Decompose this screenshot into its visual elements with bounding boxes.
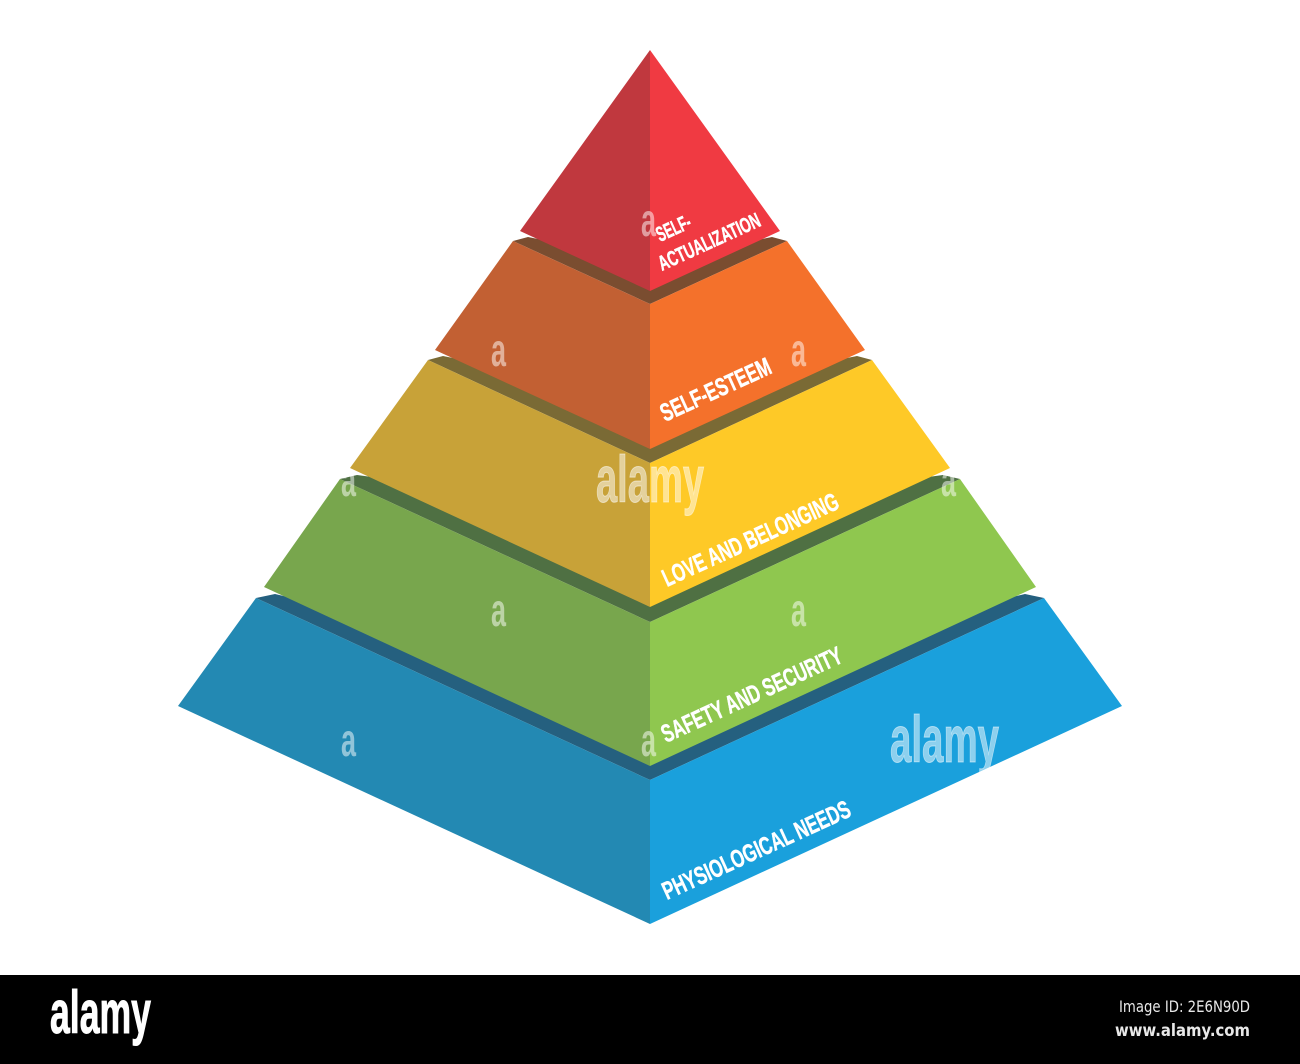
watermark tiles: a	[641, 714, 656, 766]
tier: physiological needs	[178, 594, 1122, 924]
tier: safety and security	[264, 475, 1036, 766]
footer logo: alamy	[50, 979, 151, 1046]
label: physiological needs: PHYSIOLOGICAL NEEDS	[658, 795, 855, 905]
label: self-actualization: SELF-	[653, 211, 695, 247]
label: self-esteem: SELF-ESTEEM	[656, 353, 776, 427]
label: safety and security: SAFETY AND SECURITY	[657, 642, 847, 748]
footer bar	[0, 975, 1300, 1064]
watermark tiles: alamy	[890, 702, 999, 776]
watermark tiles: a	[491, 324, 506, 376]
label: love and belonging: LOVE AND BELONGING	[658, 488, 843, 592]
watermark tiles: a	[341, 454, 356, 506]
watermark tiles	[341, 194, 999, 776]
watermark tiles: a	[341, 714, 356, 766]
pyramid	[178, 50, 1122, 924]
watermark tiles: a	[641, 194, 656, 246]
tier: love and belonging	[350, 356, 950, 607]
watermark tiles: alamy	[596, 442, 704, 516]
label: self-actualization	[653, 209, 764, 276]
tier: self-esteem	[435, 237, 865, 449]
watermark tiles: a	[491, 584, 506, 636]
image id: Image ID: 2E6N90D	[1119, 997, 1250, 1016]
website: www.alamy.com	[1115, 1021, 1250, 1041]
tier: self-actualization	[520, 50, 780, 291]
watermark tiles: a	[791, 324, 806, 376]
label: self-actualization: ACTUALIZATION	[655, 209, 764, 276]
watermark tiles: a	[941, 454, 956, 506]
watermark tiles: a	[791, 584, 806, 636]
